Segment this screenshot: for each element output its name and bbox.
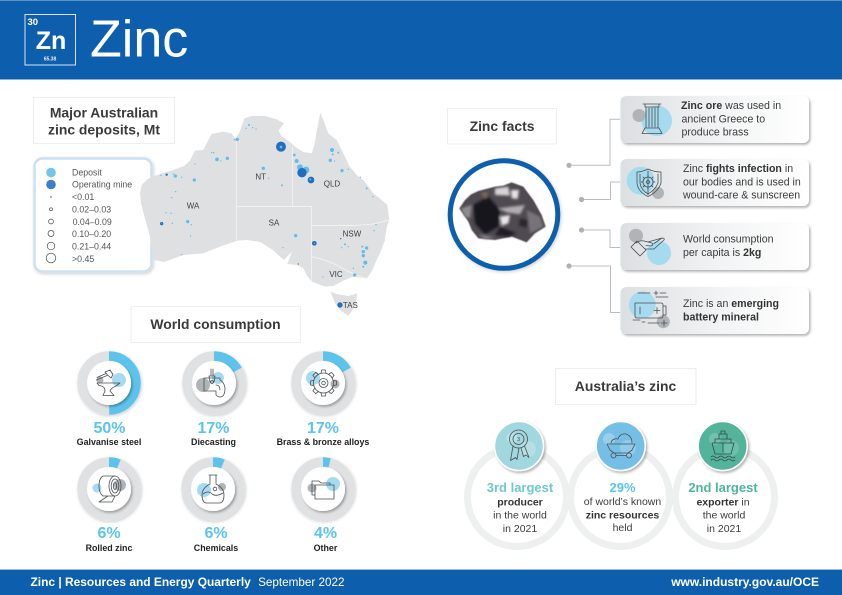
fact card: consumption per capita [620,223,809,270]
panel: map of deposits [34,98,390,316]
fact card: ancient Greece: ancient Greece to [682,114,765,126]
map heading: zinc deposits, Mt [48,122,160,138]
state labels: SA [269,218,280,227]
fact card: consumption per capita: per capita is 2kg [683,247,761,259]
state labels: VIC [329,270,343,279]
map legend: Operating mine [72,180,132,190]
fact card: ancient Greece: produce brass [682,126,749,138]
panel: Australia's zinc [468,368,774,546]
map legend: 0.10–0.20 [72,229,111,239]
donut: chemicals 6%: 6% [204,525,228,542]
footer website: www.industry.gov.au/OCE [670,575,819,589]
icon: rosette: 3 [517,437,520,443]
fact card: emerging battery mineral: Zinc is an emerging [683,298,779,310]
icon: mine cart [607,434,635,458]
state labels: NT [255,172,266,181]
donut: chemicals 6%: Chemicals [194,543,238,553]
stat: 29% of resources: of world’s known [584,496,661,508]
fact card: ancient Greece [620,96,809,143]
map heading: Major Australian [50,104,158,120]
donut: galvanise steel 50%: Galvanise steel [77,437,141,447]
panel: zinc facts [448,96,809,334]
state labels: QLD [324,180,340,189]
stat: 2nd largest exporter: exporter in [696,496,750,508]
icon: shield with virus [627,167,664,199]
icon: ship [711,431,735,461]
zinc ore rock [459,182,546,242]
periodic table element tile [25,14,76,65]
map legend: >0.45 [72,254,94,264]
donut: other 4% [296,462,350,553]
fact card: consumption per capita: World consumption [683,234,774,246]
map legend: <0.01 [72,192,94,202]
title: Zinc [90,10,188,68]
connector lines [566,119,620,312]
map of Australia [140,113,390,316]
stat: 29% of resources: held [613,522,633,534]
map legend: Deposit [72,168,102,178]
donut: brass and bronze alloys 17%: Brass & bronze alloys [277,437,369,447]
panel: world consumption [77,306,369,553]
donut: galvanise steel 50%: 50% [93,420,126,437]
deposit markers [160,124,377,278]
donut: brass and bronze alloys 17% [277,356,369,447]
operating mine markers [160,142,343,308]
icon: battery [629,291,670,328]
Australia's zinc heading: Australia’s zinc [575,378,676,394]
donut: rolled zinc 6%: Rolled zinc [86,543,132,553]
zinc facts heading: Zinc facts [470,118,535,134]
donut: chemicals 6% [186,462,240,553]
icon: open hand [629,229,671,265]
fact card: emerging battery mineral [620,287,809,334]
donut: diecasting 17% [187,356,241,447]
donut: brass and bronze alloys 17%: 17% [307,420,339,437]
donut: other 4%: Other [314,543,338,553]
fact card: fights infection: our bodies and is used in [683,176,801,188]
map legend: 0.21–0.44 [72,242,111,252]
periodic table element tile: Zn [36,27,66,55]
donut: galvanise steel 50% [77,356,141,447]
map legend: 0.04–0.09 [73,217,112,227]
donut: diecasting 17%: 17% [197,420,230,437]
donut: rolled zinc 6%: 6% [97,525,121,542]
footer source text: Zinc | Resources and Energy Quarterly September 2022 [30,575,345,589]
header band [0,0,842,80]
stat: 2nd largest exporter: the world [703,510,745,522]
state labels [187,172,362,310]
stat: 3rd largest producer: producer [497,496,543,508]
fact card: fights infection: Zinc fights infection in [683,163,793,175]
stat: 29% of resources: 29% [609,480,636,495]
stat: 3rd largest producer: in the world [493,510,547,522]
stat: 2nd largest exporter: in 2021 [707,523,741,535]
stat: 29% of resources [570,422,670,546]
state labels: WA [187,202,200,211]
icon: column [632,104,672,136]
donut: rolled zinc 6% [82,462,136,553]
stat: 2nd largest exporter [676,422,774,546]
fact card: ancient Greece: Zinc ore was used in [681,100,781,112]
world consumption heading: World consumption [150,316,281,332]
zinc ore photo in circle [450,161,558,268]
donut: other 4%: 4% [314,525,337,542]
state labels: TAS [343,301,358,310]
periodic table element tile: 65.38 [44,56,56,62]
zinc facts heading [448,108,556,144]
stat: 3rd largest producer: in 2021 [503,523,537,535]
fact card: fights infection [620,159,809,206]
stat: 3rd largest producer: 3rd largest [487,480,554,495]
state labels: NSW [343,229,362,238]
stat: 29% of resources: zinc resources [586,509,659,521]
Australia's zinc heading [556,368,696,404]
world consumption heading [131,306,300,342]
donut: diecasting 17%: Diecasting [191,437,236,447]
footer band [0,569,842,595]
map legend [34,158,152,272]
map legend: 0.02–0.03 [72,204,111,214]
fact card: fights infection: wound-care & sunscreen [682,190,800,202]
stat: 2nd largest exporter: 2nd largest [688,480,758,495]
periodic table element tile: 30 [28,17,38,28]
map heading [34,98,174,144]
stat: 3rd largest producer [468,422,566,546]
fact card: emerging battery mineral: battery mineral [683,311,759,323]
